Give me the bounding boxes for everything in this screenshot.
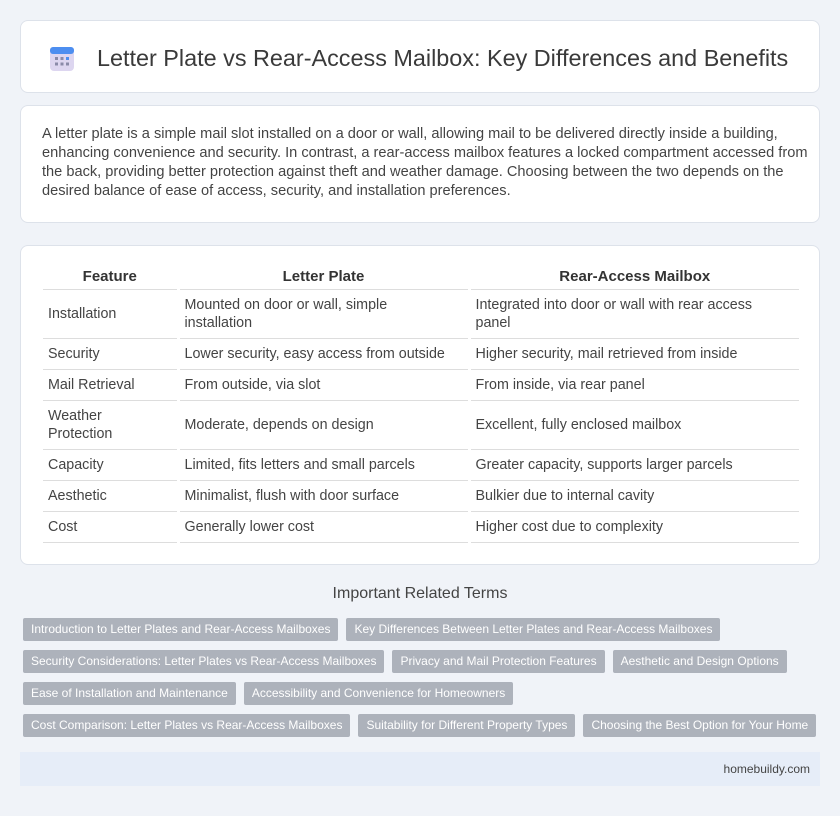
comparison table card: Protection [48,426,112,442]
comparison table card: Bulkier due to internal cavity [476,488,654,504]
comparison table card: Mounted on door or wall, simple [184,296,387,312]
comparison table card: panel [476,314,510,330]
comparison table card: Higher security, mail retrieved from inside [476,346,737,362]
comparison table card: Security [48,346,100,362]
comparison table card: Feature [83,268,137,285]
comparison table card: Aesthetic [48,488,107,504]
comparison table card: Excellent, fully enclosed mailbox [476,416,681,432]
title: Letter Plate vs Rear-Access Mailbox: Key Differences and Benefits [97,45,788,71]
related terms tags: Introduction to Letter Plates and Rear-Access Mailboxes [31,622,330,636]
related terms tags: Accessibility and Convenience for Homeowners [252,686,505,700]
comparison table card: Moderate, depends on design [184,416,374,432]
comparison table card: Weather [48,408,102,424]
related terms heading: Important Related Terms [333,585,507,602]
comparison table card: Rear-Access Mailbox [559,268,710,285]
comparison table card: Limited, fits letters and small parcels [184,456,415,472]
related terms tags: Choosing the Best Option for Your Home [591,718,808,732]
comparison table card: Letter Plate [283,268,364,285]
footer: homebuildy.com [724,762,810,776]
comparison table card: Generally lower cost [184,518,314,534]
comparison table card: Minimalist, flush with door surface [184,488,399,504]
related terms tags: Cost Comparison: Letter Plates vs Rear-Access Mailboxes [31,718,342,732]
comparison table card: Higher cost due to complexity [476,518,663,534]
related terms tags: Privacy and Mail Protection Features [400,654,597,668]
header card [20,20,820,93]
intro text card [20,105,820,223]
comparison table card: From outside, via slot [184,376,320,392]
comparison table card: Mail Retrieval [48,376,135,392]
comparison table card: Capacity [48,456,104,472]
comparison table card: Lower security, easy access from outside [184,346,445,362]
comparison table card [20,245,820,565]
related terms tags: Key Differences Between Letter Plates and Rear-Access Mailboxes [354,622,712,636]
comparison table card: Installation [48,306,116,322]
footer [20,752,820,786]
related terms tags: Security Considerations: Letter Plates vs Rear-Access Mailboxes [31,654,376,668]
related terms tags: Aesthetic and Design Options [621,654,779,668]
comparison table card: Integrated into door or wall with rear access [476,296,752,312]
related terms tags: Ease of Installation and Maintenance [31,686,228,700]
intro text card: desired balance of ease of access, security, and installation preferences. [42,183,511,199]
intro text card: enhancing convenience and security. In contrast, a rear-access mailbox features a locked compartment accessed from [42,145,807,161]
icon: calendar [50,47,74,71]
comparison table card: Greater capacity, supports larger parcels [476,456,733,472]
comparison table card: installation [184,314,252,330]
intro text card: A letter plate is a simple mail slot installed on a door or wall, allowing mail to be delivered directly inside a building, [42,126,778,142]
intro text card: the back, providing better protection against theft and weather damage. Choosing between the two depends on the [42,164,784,180]
related terms tags [23,618,816,737]
comparison table card: From inside, via rear panel [476,376,645,392]
comparison table card: Cost [48,518,77,534]
related terms tags: Suitability for Different Property Types [366,718,567,732]
